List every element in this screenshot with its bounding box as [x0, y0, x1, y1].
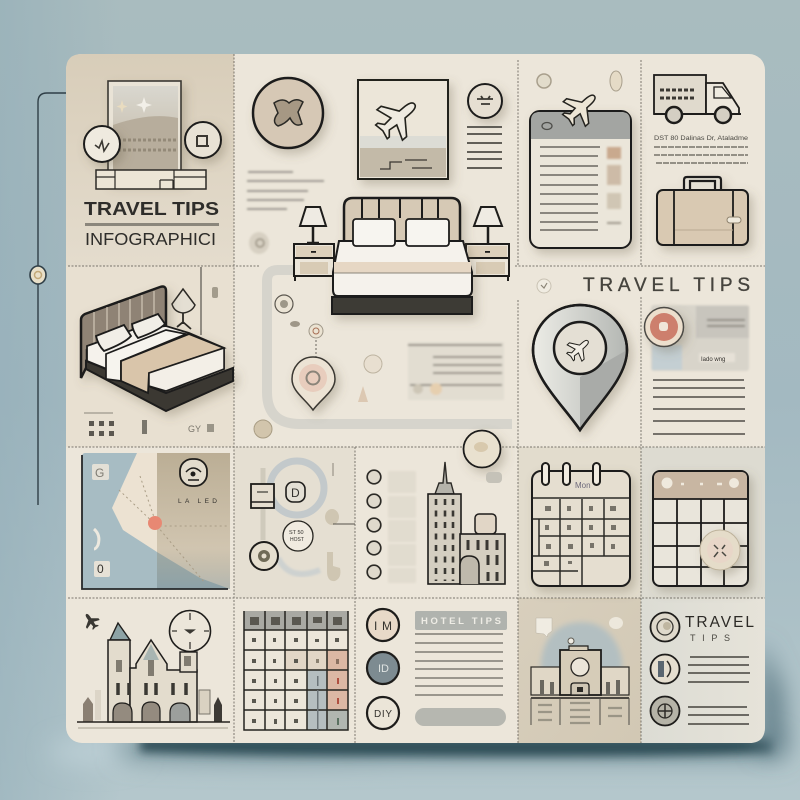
panel: photo card and notes: [644, 305, 749, 434]
button circle: [700, 530, 740, 570]
badge O: 0: [97, 562, 104, 576]
label badge: ST 50: [289, 530, 304, 536]
D badge: D: [291, 486, 300, 500]
floating marks: [537, 71, 622, 91]
hotel text lines: [415, 634, 503, 695]
photo caption: Iado wng: [701, 357, 725, 363]
lens badge: [250, 542, 278, 570]
panel: clock building: [531, 617, 629, 725]
icon: window scene: [108, 81, 181, 181]
pill heading: HOTEL TIPS: [421, 616, 501, 627]
panel: title cell: [84, 81, 221, 249]
main card: [66, 54, 765, 743]
small icon row: GY: [188, 424, 201, 434]
connector line with node: [30, 93, 66, 505]
icon: bed: [81, 286, 233, 411]
calendar day marks: [544, 506, 616, 566]
panel: castle skyline: [77, 610, 230, 728]
calendar rings: [542, 463, 600, 485]
travel text lines: [688, 657, 750, 724]
icon: drawer console: [96, 170, 206, 189]
panel: coastline map: [82, 453, 230, 589]
floating tag: [486, 472, 502, 483]
map label: LA LED: [178, 498, 217, 505]
truck text lines: [654, 147, 748, 163]
ring: [263, 461, 324, 574]
small pin markers: [275, 295, 382, 402]
card drop shadow: [50, 640, 786, 764]
icon: wall divider: [200, 267, 202, 335]
table grid: [244, 611, 348, 730]
ticket thumbnails: [607, 147, 621, 224]
bottom marker stone: [254, 420, 272, 438]
icon: framed airplane picture: [358, 80, 448, 179]
text lines left: [247, 172, 324, 209]
panel: ring diagram: [250, 461, 355, 581]
badge grey: [650, 696, 680, 726]
bottom pill: [415, 708, 506, 726]
icon: airplane: [557, 84, 605, 132]
phone badge: [180, 459, 207, 486]
ground lines: [77, 721, 230, 723]
badge IM: IM: [374, 619, 392, 633]
blurred text block: [408, 342, 504, 400]
icon: front-view bed: [332, 198, 472, 314]
table colored cells: [244, 611, 348, 730]
panel: travel list: [650, 612, 754, 726]
icon: suitcase: [657, 177, 748, 245]
decorative caption strip: [85, 223, 219, 226]
text lines right: [467, 127, 502, 168]
land shape: [112, 453, 230, 589]
panel: city building list: [367, 430, 505, 584]
red location mark: [148, 516, 162, 530]
panel: flight ticket: [530, 71, 631, 248]
heading: travel tips: TRAVEL TIPS: [583, 275, 750, 296]
icon: round star badge: [253, 78, 323, 148]
map routes: [119, 476, 229, 583]
icon: delivery truck: [654, 75, 741, 123]
panel: table chart: [244, 611, 348, 730]
panel: tan calendar: [653, 471, 748, 586]
note lines: [653, 380, 745, 434]
clock: [170, 610, 210, 652]
panel: ring calendar: [532, 463, 630, 586]
list rows: [388, 471, 416, 583]
calendar grid: [653, 471, 748, 586]
map border: [82, 455, 228, 589]
label badge: HOST: [290, 537, 304, 543]
white swoosh: [94, 529, 99, 549]
panel: bedroom poster: [247, 78, 502, 254]
side figures: [325, 463, 355, 581]
grid dividers: [68, 54, 765, 743]
bullet icons: [367, 470, 381, 579]
panel: travel tips pin: [533, 275, 750, 430]
truck caption: DST 80 Dalinas Dr, Ataladme: [654, 135, 748, 142]
small check mark: [537, 279, 551, 293]
heading: travel tips: TRAVEL TIPS: [84, 198, 219, 219]
device icon: [251, 484, 274, 508]
label badge: [283, 521, 313, 551]
calendar header label: Mon: [575, 481, 591, 490]
panel: truck and suitcase: [654, 75, 748, 245]
icon: ticket card: [530, 111, 631, 248]
small wall mark: [212, 287, 218, 298]
bird icon: [80, 610, 102, 632]
badge bottom: DIY: [374, 709, 392, 720]
badge spiral: [650, 612, 680, 642]
blue dome: [541, 622, 622, 680]
panel: hotel tips: [367, 609, 507, 729]
road path: [267, 270, 512, 424]
calendar body: [532, 471, 630, 586]
icon: location pin: [533, 305, 627, 430]
building: [531, 638, 629, 725]
table marks: [250, 617, 342, 730]
panel: center bed: [294, 198, 509, 314]
badge half: [650, 654, 680, 684]
trees and side wing: [83, 690, 222, 722]
castle building: [108, 623, 197, 722]
icon: small plane badge: [468, 84, 502, 118]
speech marks: [536, 617, 623, 637]
icon: right round badge: [185, 122, 221, 158]
red circle badge: [644, 308, 684, 346]
icon: tower building: [428, 462, 505, 584]
icon: left lamp and nightstand: [294, 207, 334, 281]
panel: route map: [254, 270, 512, 438]
large pink pin: [292, 357, 335, 410]
shaded half: [157, 453, 230, 589]
header marks: [662, 478, 739, 488]
icon: pendant lamp: [172, 289, 195, 329]
heading: infographic: INFOGRAPHICI: [85, 229, 216, 249]
small round mark: [249, 232, 269, 254]
badge O: [94, 561, 110, 577]
dark badge: ID: [378, 663, 389, 675]
panel: isometric bed: [81, 267, 233, 436]
ticket text lines: [540, 147, 600, 230]
badge G: [92, 464, 109, 480]
heading: travel: TRAVEL: [685, 614, 754, 631]
icon: left round badge: [84, 126, 120, 162]
sub heading: tips: TIPS: [690, 633, 730, 643]
icon: right lamp and nightstand: [466, 207, 509, 281]
photo panel: [651, 305, 749, 371]
badge G: G: [95, 466, 104, 480]
floating badge: [464, 430, 500, 468]
small icon row: [84, 413, 214, 436]
